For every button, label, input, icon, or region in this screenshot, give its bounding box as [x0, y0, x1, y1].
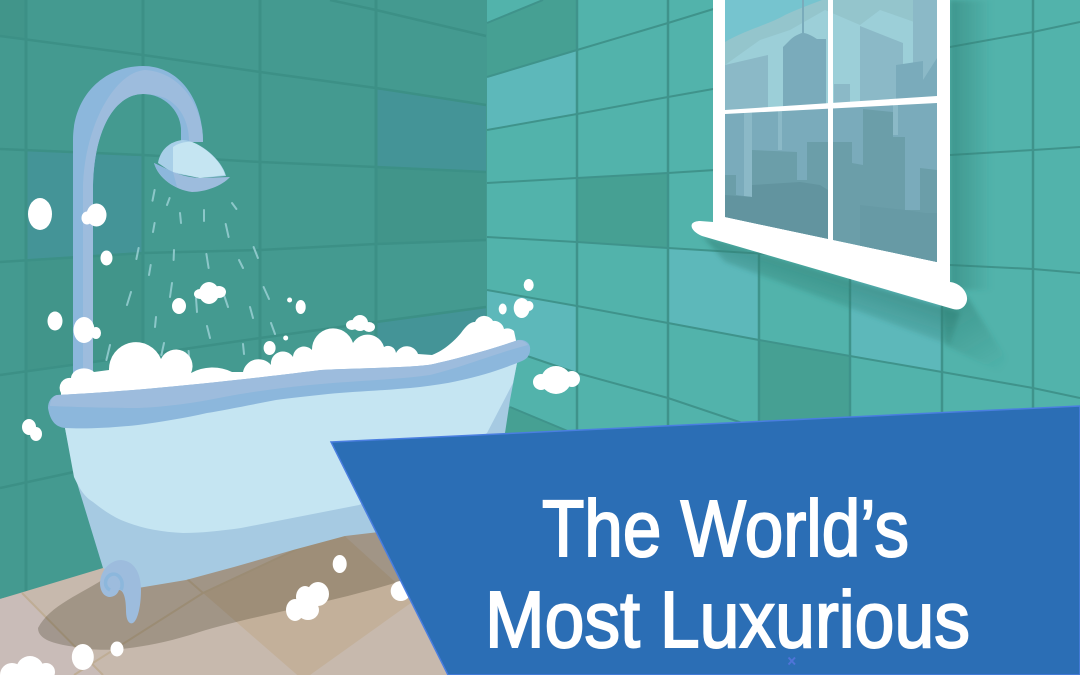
small cross mark	[788, 658, 795, 664]
title line 1: The World’s	[542, 484, 909, 573]
tub rim	[48, 340, 530, 428]
title banner	[331, 406, 1080, 675]
window shadows	[702, 0, 1006, 372]
water drops	[106, 190, 275, 360]
foam	[60, 316, 517, 405]
title line 2: Most Luxurious	[485, 575, 970, 664]
back wall tiles	[0, 0, 487, 610]
window frame	[713, 0, 950, 287]
window muntins	[725, 0, 937, 245]
window	[692, 0, 967, 310]
tub body	[65, 363, 517, 533]
tub lower shading	[65, 363, 517, 588]
window sill	[692, 221, 967, 310]
shower head	[154, 140, 230, 192]
tub shadow on floor	[38, 515, 420, 650]
shower pipe	[73, 66, 203, 380]
tub foot	[100, 560, 141, 623]
side wall tiles	[487, 0, 1080, 450]
bathtub	[48, 316, 530, 623]
soap bubbles	[0, 198, 580, 675]
window city view	[725, 0, 937, 265]
title	[485, 484, 970, 664]
floor	[0, 430, 500, 675]
